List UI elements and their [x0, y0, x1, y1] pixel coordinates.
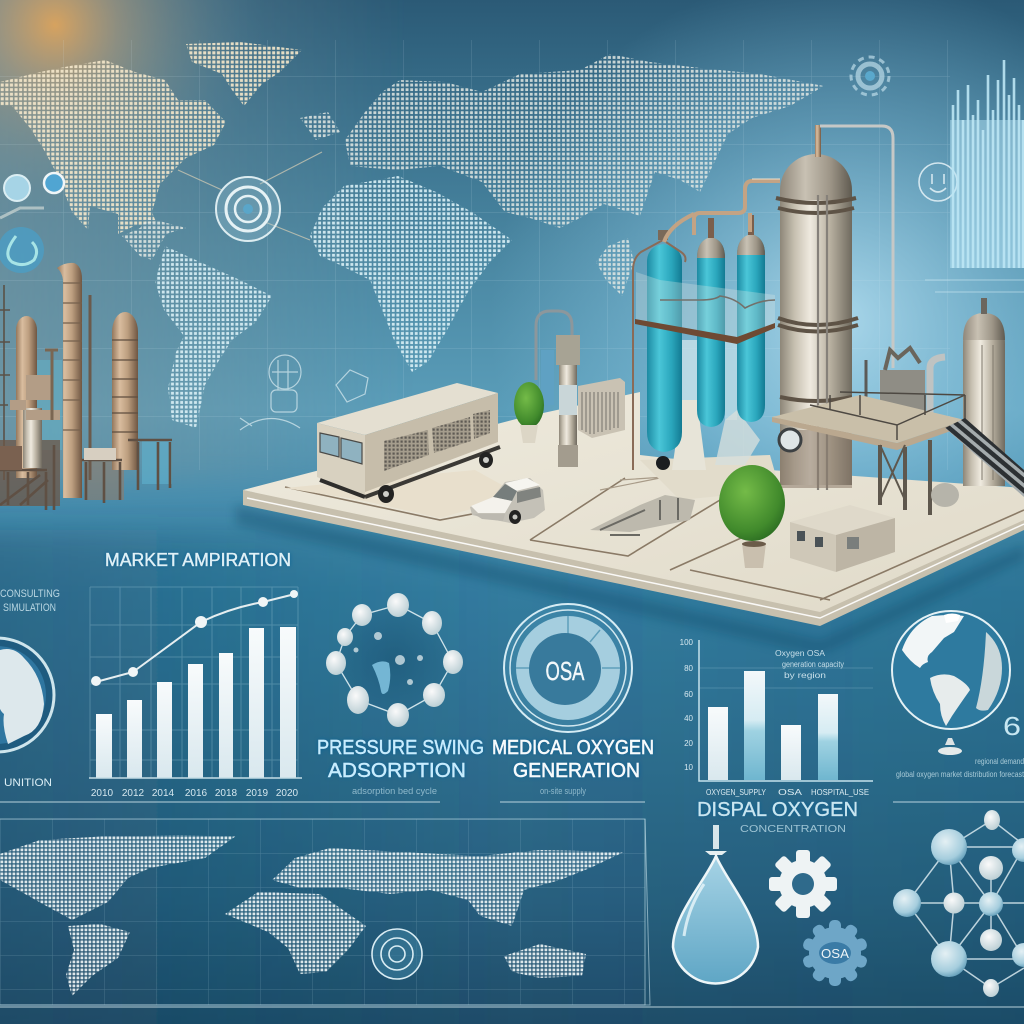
tank C [737, 215, 765, 422]
gauge [779, 429, 801, 451]
big tower [776, 125, 893, 490]
map region: south america [155, 246, 272, 428]
chart note [775, 649, 844, 680]
heading: medical oxygen generation: MEDICAL OXYGEN [492, 737, 654, 759]
heading: pressure swing adsorption [317, 737, 484, 782]
icon: water drop [673, 825, 758, 983]
axis labels: 2016 [185, 788, 208, 799]
axis labels: 2018 [215, 788, 238, 799]
caption under adsorption: adsorption bed cycle [352, 786, 437, 796]
blue backdrop [30, 360, 62, 450]
icon: blue gear with OSA [802, 920, 868, 986]
OSA badge: OSA [546, 656, 585, 686]
icon: white gear [769, 850, 837, 918]
icon: node connector target [178, 152, 322, 241]
pale strip between tanks [682, 340, 697, 430]
lower map: south america [66, 924, 130, 996]
divider lines [0, 802, 1024, 1007]
OSA badge [504, 604, 632, 732]
truck wheels [378, 452, 493, 503]
icon: upper right circle [919, 163, 957, 201]
glass railing [636, 272, 775, 340]
cylinder: white [23, 408, 42, 468]
lower map: north america [0, 835, 236, 920]
bar chart: market growth [89, 587, 302, 799]
tables [0, 440, 172, 510]
heading: hospital oxygen: DISPAL OXYGEN [697, 799, 858, 821]
heading: market amplification: MARKET AMPIRATION [105, 550, 291, 570]
lower map: australia [504, 944, 586, 978]
column [559, 335, 577, 465]
value bars [708, 707, 728, 780]
y labels: 60 [684, 690, 694, 699]
tank B [697, 218, 725, 427]
left text block: SIMULATION [3, 602, 56, 614]
machinery [866, 348, 945, 415]
chart grid [90, 587, 298, 778]
x labels: OXYGEN_SUPPLY [706, 788, 767, 797]
chart note: generation capacity [782, 660, 844, 669]
tanks teal [633, 179, 780, 470]
y labels: 100 [680, 638, 694, 647]
pipe: thin line [88, 295, 92, 480]
plant: tree with pot [719, 465, 785, 568]
icon: top gear [851, 57, 889, 95]
left text block: CONSULTING [0, 588, 60, 600]
car [470, 478, 545, 524]
dense base [0, 440, 60, 506]
globe stand [938, 738, 962, 755]
map region: east asia islands [596, 238, 634, 296]
right text block [896, 711, 1024, 779]
truck [317, 383, 500, 503]
tower rails [818, 195, 827, 490]
left refinery [0, 263, 172, 510]
axis labels [91, 788, 299, 799]
chart note: by region [784, 671, 826, 680]
axis labels: 2019 [246, 788, 269, 799]
right tank [963, 298, 1005, 486]
axis labels: 2014 [152, 788, 175, 799]
top pipe [820, 126, 893, 368]
chart: upper right spike bars [925, 60, 1024, 292]
heading: pressure swing adsorption: ADSORPTION [328, 760, 466, 782]
right globe [892, 611, 1010, 729]
caption under generation: on-site supply [540, 786, 586, 796]
sketch icons: faint drawings [240, 355, 368, 430]
y labels [680, 638, 694, 772]
trend line [92, 594, 295, 683]
small equipment: column and AC unit [536, 311, 625, 467]
lower map icon [372, 929, 422, 979]
column: short left [16, 316, 37, 478]
machinery [10, 375, 60, 420]
stairs [945, 418, 1024, 497]
truck windows [320, 433, 362, 464]
x labels: HOSPITAL_USE [811, 788, 869, 797]
x labels [706, 788, 869, 797]
platform top [243, 392, 1024, 612]
main platform [243, 392, 1024, 626]
legs [880, 440, 930, 515]
axis labels: 2012 [122, 788, 145, 799]
molecule ring [326, 593, 463, 727]
heading: medical oxygen generation: GENERATION [513, 760, 640, 782]
right text block: 6 [1003, 711, 1021, 741]
map region: africa [310, 176, 512, 372]
building small [790, 505, 895, 572]
left text block: UNITION [4, 777, 52, 789]
x labels: OSA [778, 788, 803, 797]
y labels: 40 [684, 714, 694, 723]
left globe [0, 638, 54, 752]
plant: left bush [514, 382, 544, 443]
small machine on plate [590, 495, 695, 535]
axis labels: 2020 [276, 788, 299, 799]
ground equipment [931, 483, 959, 507]
network molecule [893, 810, 1024, 997]
map frame [0, 819, 645, 1005]
AC unit [578, 378, 625, 438]
tank A [633, 230, 686, 470]
support glass [672, 400, 706, 470]
heading: hospital oxygen: CONCENTRATION [740, 824, 846, 835]
icon: blue gear with OSA: OSA [821, 946, 849, 961]
shelf [635, 319, 775, 344]
chart note: Oxygen OSA [775, 649, 826, 658]
scaffold [0, 285, 10, 480]
arch pipe [536, 311, 572, 380]
bars [96, 627, 296, 778]
lower map: africa [225, 892, 366, 974]
tower bands [776, 198, 858, 401]
column: tall [57, 263, 82, 498]
map region: central america [122, 218, 186, 260]
world map: upper dotted map [0, 42, 824, 428]
copper pipes [664, 181, 780, 242]
axis labels: 2010 [91, 788, 114, 799]
truck grille [384, 410, 490, 471]
bar chart: oxygen [680, 638, 873, 797]
railing [810, 392, 965, 440]
lower map: eurasia [272, 848, 624, 926]
plate shadow [236, 505, 1024, 655]
y labels: 10 [684, 763, 694, 772]
lower world map [0, 819, 650, 1005]
map region: north america [0, 60, 226, 234]
heading: pressure swing adsorption: PRESSURE SWING [317, 737, 484, 759]
walkway platform [772, 348, 1024, 515]
heading: medical oxygen generation [492, 737, 654, 782]
heading: hospital oxygen [697, 799, 858, 835]
y labels: 20 [684, 739, 694, 748]
left text block [0, 588, 60, 789]
map region: greenland [186, 42, 302, 106]
y labels: 80 [684, 664, 694, 673]
platform side [243, 490, 1024, 626]
icons: left bubbles [0, 173, 64, 273]
column: right [112, 312, 138, 470]
map region: eurasia [345, 54, 824, 228]
